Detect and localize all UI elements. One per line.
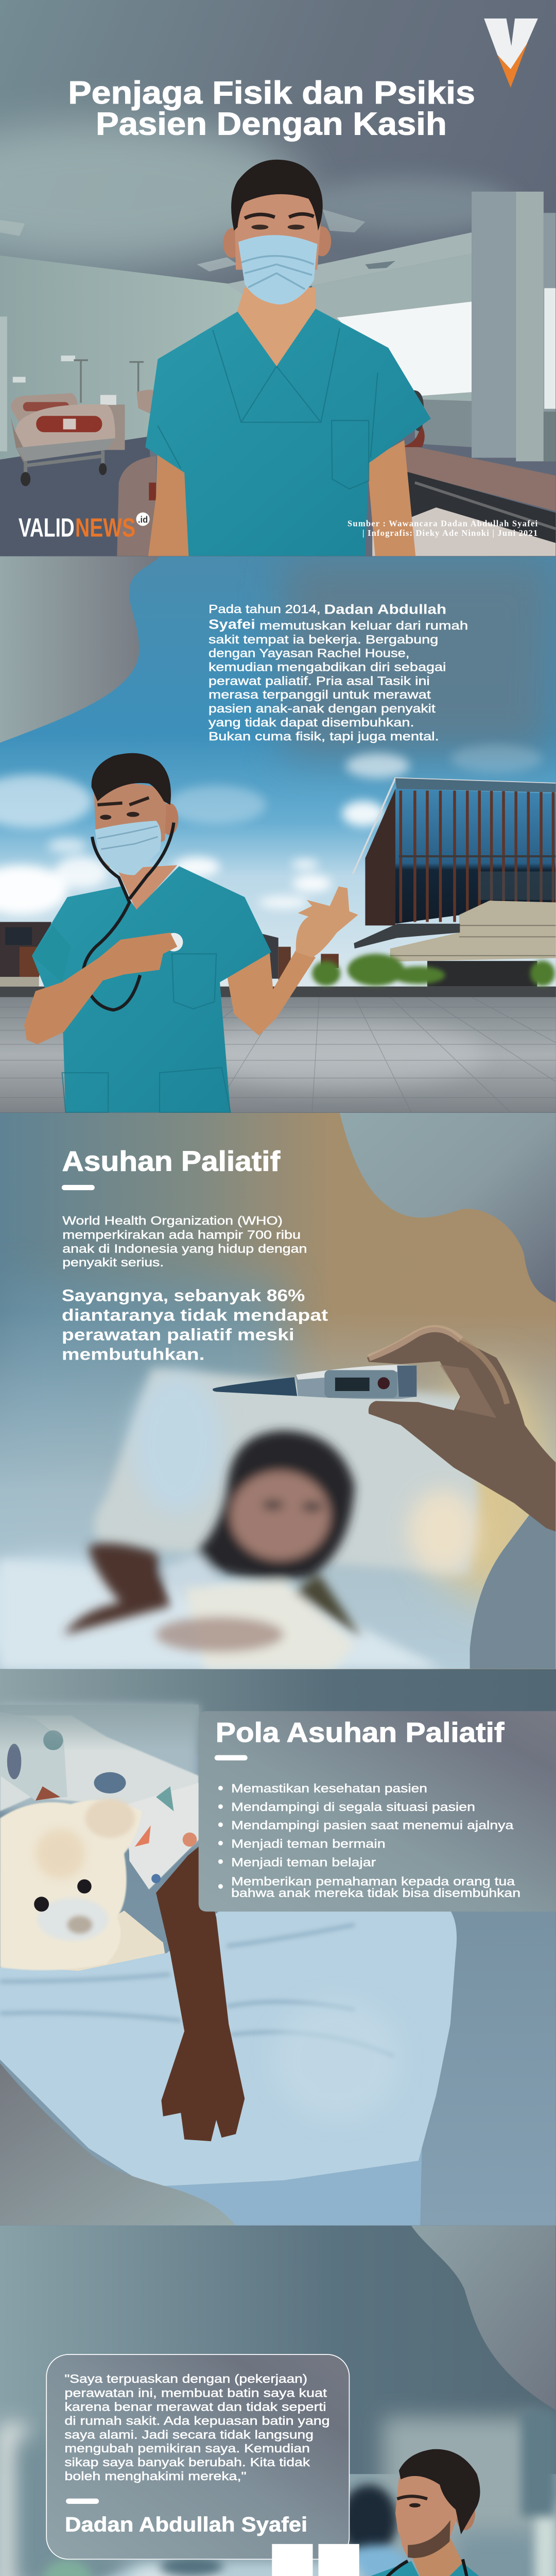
intro paragraph: memutuskan keluar dari rumah bbox=[259, 619, 468, 632]
background buildings bbox=[0, 922, 339, 987]
sheet behind bbox=[0, 1705, 199, 1846]
WHO paragraph: World Health Organization (WHO) bbox=[62, 1214, 283, 1227]
WHO paragraph: anak di Indonesia yang hidup dengan bbox=[62, 1242, 307, 1255]
hair bbox=[231, 160, 323, 231]
nurse with folder bbox=[268, 2449, 532, 2576]
WHO paragraph bbox=[62, 1214, 307, 1269]
quote box bbox=[46, 2354, 349, 2559]
blurred ward photo bbox=[0, 2410, 555, 2576]
upper gradient bbox=[0, 2226, 556, 2474]
quote text: di rumah sakit. Ada kepuasan batin yang bbox=[64, 2414, 330, 2427]
logo V mark bbox=[484, 19, 538, 88]
thermometer bbox=[213, 1365, 416, 1399]
heading: Asuhan Paliatif bbox=[62, 1145, 281, 1177]
panel: Asuhan Paliatif bbox=[0, 1113, 556, 1669]
tan blue gradient bbox=[0, 1113, 556, 1669]
raised hand bbox=[296, 887, 358, 957]
key statistic paragraph: Sayangnya, sebanyak 86% bbox=[62, 1286, 305, 1305]
title: Penjaga Fisik dan Psikis bbox=[68, 75, 475, 111]
bullet list: Memberikan pemahaman kepada orang tua bbox=[231, 1874, 515, 1888]
decorative blob bbox=[0, 2063, 236, 2225]
WHO paragraph: memperkirakan ada hampir 700 ribu bbox=[62, 1228, 301, 1242]
hand holding thermometer bbox=[367, 1327, 555, 1532]
clouds bbox=[0, 744, 543, 915]
hospital room backdrop bbox=[0, 121, 555, 556]
quote text: mengubah pemikiran saya. Kemudian bbox=[64, 2442, 310, 2455]
stethoscope bbox=[362, 2559, 503, 2576]
face bbox=[455, 2496, 475, 2530]
neck bbox=[411, 2538, 463, 2576]
left arm and hand on chest bbox=[24, 933, 177, 1044]
sleeve bbox=[470, 1507, 555, 1669]
logo ValidNews.id bbox=[19, 513, 150, 542]
key statistic paragraph: perawatan paliatif meski bbox=[62, 1326, 294, 1344]
quote text: saya alami. Jadi secara tidak langsung bbox=[64, 2428, 314, 2441]
low wall bbox=[0, 987, 556, 997]
title bbox=[68, 75, 475, 142]
source credit: Sumber : Wawancara Dadan Abdullah Syafei bbox=[348, 518, 538, 528]
bullet list: Menjadi teman bermain bbox=[231, 1837, 386, 1850]
key statistic paragraph: diantaranya tidak mendapat bbox=[62, 1306, 328, 1325]
sky bbox=[0, 556, 556, 1000]
top gradient bbox=[0, 1669, 556, 1754]
logo ValidNews.id: NEWS bbox=[75, 513, 135, 542]
nurse with stethoscope bbox=[24, 753, 358, 1112]
logo ValidNews.id: VALID bbox=[19, 513, 75, 542]
plaza floor bbox=[0, 997, 556, 1112]
source credit: | Infografis: Dieky Ade Ninoki | Juni 2021 bbox=[362, 528, 537, 538]
intro paragraph: pasien anak-anak dengan penyakit bbox=[208, 702, 436, 715]
quote text: boleh menghakimi mereka," bbox=[64, 2469, 247, 2483]
arms bbox=[148, 455, 192, 556]
blurred bedroom photo bbox=[0, 1283, 556, 1669]
background bbox=[0, 1669, 556, 2226]
intro paragraph: dengan Yayasan Rachel House, bbox=[208, 647, 410, 660]
ears and face bbox=[223, 228, 236, 258]
decorative blob bbox=[411, 2226, 555, 2410]
icon: closing quotation marks bbox=[272, 2544, 359, 2576]
decorative blob bbox=[340, 1113, 555, 1302]
neck bbox=[237, 287, 316, 369]
panel: introduction with hospital building bbox=[0, 556, 556, 1112]
plants bbox=[312, 954, 555, 986]
panel: Pola Asuhan Paliatif bbox=[0, 1669, 556, 2226]
nurse with mask bbox=[145, 160, 431, 556]
hospital beds left bbox=[11, 360, 156, 556]
surgical mask bbox=[238, 235, 317, 304]
bullet list: bahwa anak mereka tidak bisa disembuhkan bbox=[231, 1886, 520, 1900]
key statistic paragraph bbox=[62, 1286, 328, 1363]
panel heading: Pola Asuhan Paliatif bbox=[216, 1717, 505, 1748]
stethoscope bbox=[83, 823, 174, 1010]
background gradient bbox=[0, 0, 411, 556]
intro paragraph bbox=[208, 602, 468, 743]
quote text: perawatan ini, membuat batin saya kuat bbox=[64, 2386, 327, 2400]
bullet list: Menjadi teman belajar bbox=[231, 1855, 376, 1869]
dark gradient right of sky bbox=[284, 556, 555, 755]
logo ValidNews.id: .id bbox=[138, 515, 148, 525]
source credit bbox=[348, 518, 538, 538]
bullet list: Memastikan kesehatan pasien bbox=[231, 1782, 427, 1795]
bed sheet bbox=[0, 1910, 457, 2225]
scrubs bbox=[32, 866, 271, 1112]
intro paragraph: Bukan cuma fisik, tapi juga mental. bbox=[208, 730, 439, 743]
background bbox=[0, 2226, 556, 2576]
patient bed right bbox=[372, 390, 555, 556]
intro paragraph: Pada tahun 2014, bbox=[208, 602, 321, 616]
arm of the child bbox=[156, 1846, 245, 2141]
panel: testimony quote bbox=[0, 2226, 556, 2576]
quote text: sikap saya banyak berubah. Kita tidak bbox=[64, 2455, 310, 2469]
blurred child bbox=[64, 1430, 362, 1669]
list panel bbox=[199, 1711, 556, 1911]
teddy bear bbox=[0, 1799, 165, 1971]
quote text: "Saya terpuaskan dengan (pekerjaan) bbox=[64, 2372, 307, 2385]
quote text: karena benar merawat dan tidak seperti bbox=[64, 2400, 326, 2414]
raised right arm bbox=[227, 947, 316, 1036]
intro paragraph: yang tidak dapat disembuhkan. bbox=[208, 716, 414, 729]
head bbox=[161, 803, 178, 835]
intro paragraph: kemudian mengabdikan diri sebagai bbox=[208, 660, 446, 673]
intro paragraph: merasa terpanggil untuk merawat bbox=[208, 688, 431, 701]
bullet list bbox=[218, 1782, 520, 1900]
quote text bbox=[64, 2372, 330, 2483]
mask bbox=[95, 821, 161, 875]
hair bbox=[399, 2449, 480, 2534]
gray blob bbox=[0, 556, 160, 743]
WHO paragraph: penyakit serius. bbox=[62, 1256, 164, 1269]
patterned blanket bbox=[0, 1712, 199, 1889]
neck bbox=[117, 865, 177, 911]
bullet list: Mendampingi pasien saat menemui ajalnya bbox=[231, 1819, 514, 1832]
panel: hero hospital room bbox=[0, 0, 556, 556]
soft fade over blanket top bbox=[0, 1705, 199, 1751]
intro paragraph: Dadan Abdullah bbox=[324, 602, 446, 617]
speaker name: Dadan Abdullah Syafei bbox=[65, 2514, 307, 2536]
intro paragraph: perawat paliatif. Pria asal Tasik ini bbox=[208, 674, 430, 687]
scrubs top bbox=[145, 309, 431, 556]
intro paragraph: Syafei bbox=[208, 617, 255, 632]
heading bar bbox=[62, 1185, 95, 1190]
left sleeve bbox=[32, 925, 71, 982]
modern hospital building bbox=[353, 778, 555, 987]
eyebrows and eyes bbox=[245, 214, 314, 218]
scrubs bbox=[304, 2561, 532, 2576]
bullet list: Mendampingi di segala situasi pasien bbox=[231, 1800, 475, 1814]
intro paragraph: sakit tempat ia bekerja. Bergabung bbox=[208, 633, 438, 646]
key statistic paragraph: membutuhkan. bbox=[62, 1345, 204, 1363]
title: Pasien Dengan Kasih bbox=[96, 107, 447, 142]
